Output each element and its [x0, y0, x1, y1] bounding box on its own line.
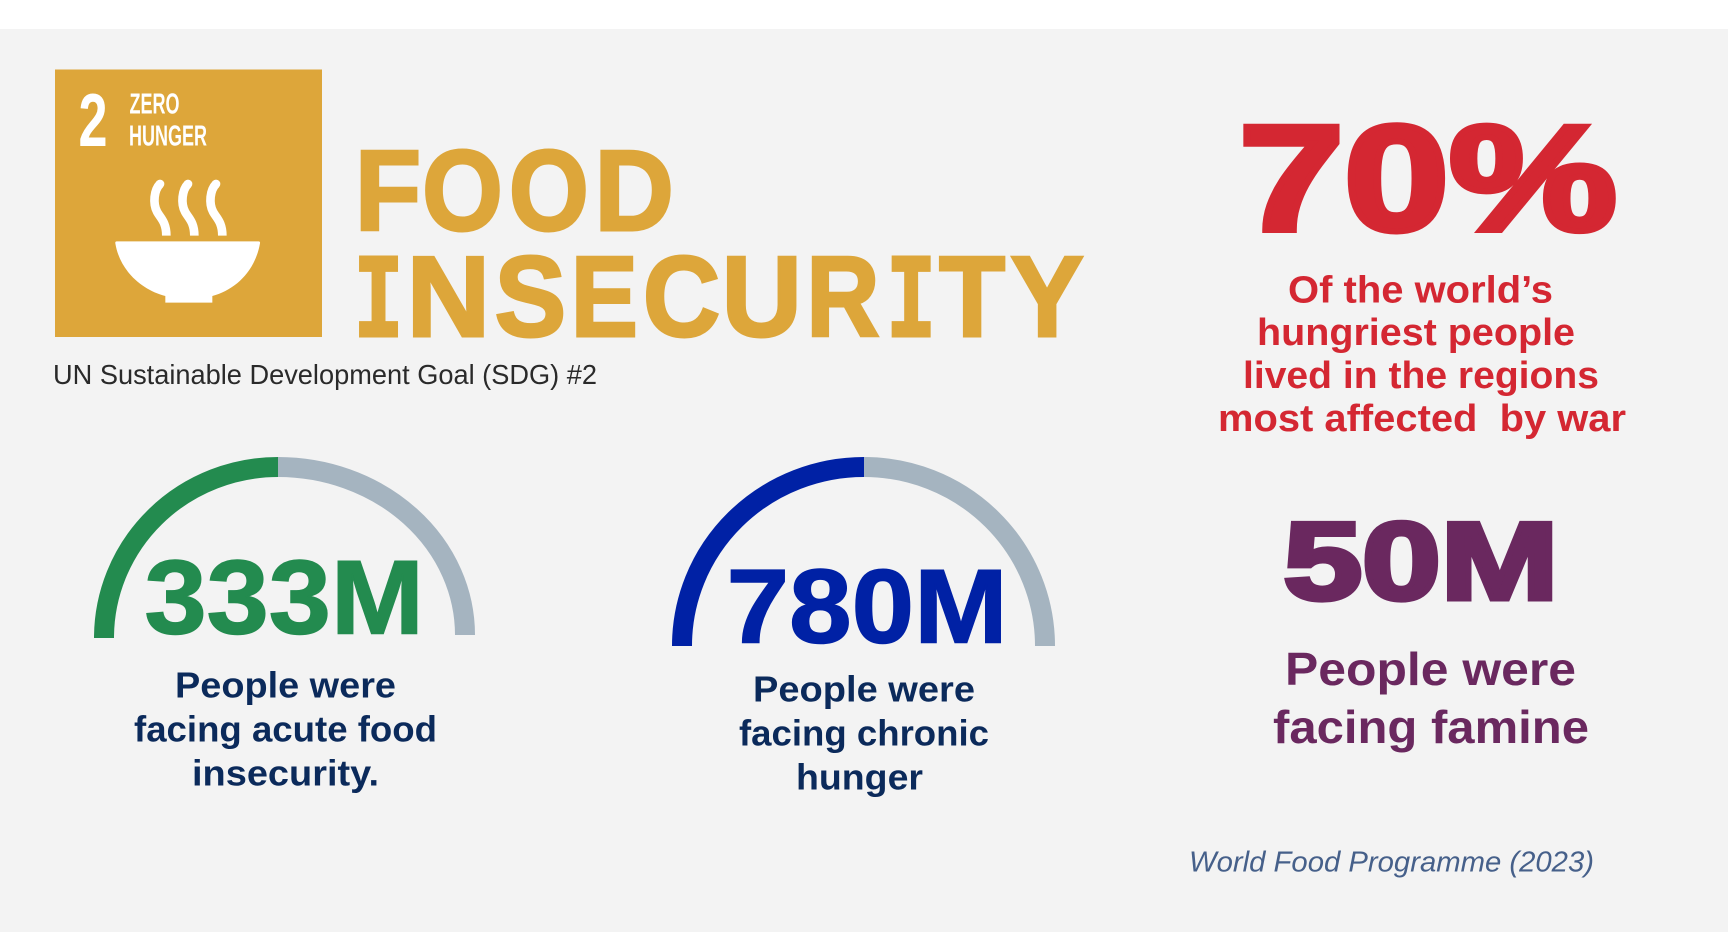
caption: People were	[175, 665, 396, 706]
caption: most affected by war	[1218, 398, 1626, 440]
title: Food Insecurity: Y	[1011, 233, 1084, 361]
title: Food Insecurity: U	[722, 233, 802, 361]
caption: lived in the regions	[1243, 355, 1599, 397]
stat block: 50M	[1273, 500, 1589, 753]
title: Food Insecurity: S	[495, 233, 566, 361]
title: Food Insecurity: I	[354, 237, 403, 373]
caption: People were	[1285, 643, 1576, 695]
caption	[739, 669, 989, 798]
caption: facing famine	[1273, 701, 1589, 753]
caption: hungriest people	[1257, 312, 1575, 354]
caption: Of the world’s	[1288, 269, 1553, 311]
title: Food Insecurity: D	[594, 127, 674, 255]
title: Food Insecurity: T	[939, 233, 1005, 361]
gauge arc	[682, 467, 1045, 646]
gauge: 333M acute food insecurity	[104, 467, 465, 794]
stat: 50M: 50M	[1284, 500, 1558, 623]
title: Food Insecurity: F	[355, 127, 421, 255]
title: Food Insecurity: E	[571, 233, 638, 361]
gauge: 780M chronic hunger	[682, 467, 1045, 798]
caption: hunger	[796, 757, 923, 798]
title: Food Insecurity: R	[806, 233, 880, 361]
title: Food Insecurity: O	[509, 127, 589, 255]
title: Food Insecurity: C	[643, 233, 720, 361]
source note: World Food Programme (2023)	[1189, 846, 1594, 878]
caption: facing chronic	[739, 713, 989, 754]
tile label: HUNGER	[129, 121, 207, 153]
stat: 333M: 333M	[144, 540, 424, 656]
stat: 70%: 70%	[1239, 94, 1617, 262]
title: Food Insecurity: O	[422, 127, 503, 255]
tile label	[129, 88, 207, 153]
caption: insecurity.	[192, 753, 379, 794]
title: Food Insecurity	[354, 127, 1084, 373]
caption	[134, 665, 437, 794]
title: Food Insecurity: N	[407, 233, 490, 361]
tile number: 2	[78, 78, 108, 162]
subtitle: UN Sustainable Development Goal (SDG) #2	[53, 359, 597, 390]
caption	[1218, 269, 1626, 440]
caption: People were	[753, 669, 975, 710]
icon: steaming bowl	[115, 180, 260, 303]
tile label: ZERO	[130, 88, 180, 120]
caption: facing acute food	[134, 709, 437, 750]
icon: SDG 2 zero hunger tile	[55, 70, 322, 337]
stat block: 70%	[1218, 94, 1626, 440]
caption	[1273, 643, 1589, 753]
stat: 780M: 780M	[727, 548, 1008, 666]
title: Food Insecurity: I	[886, 237, 936, 373]
gauge arc	[104, 467, 465, 638]
